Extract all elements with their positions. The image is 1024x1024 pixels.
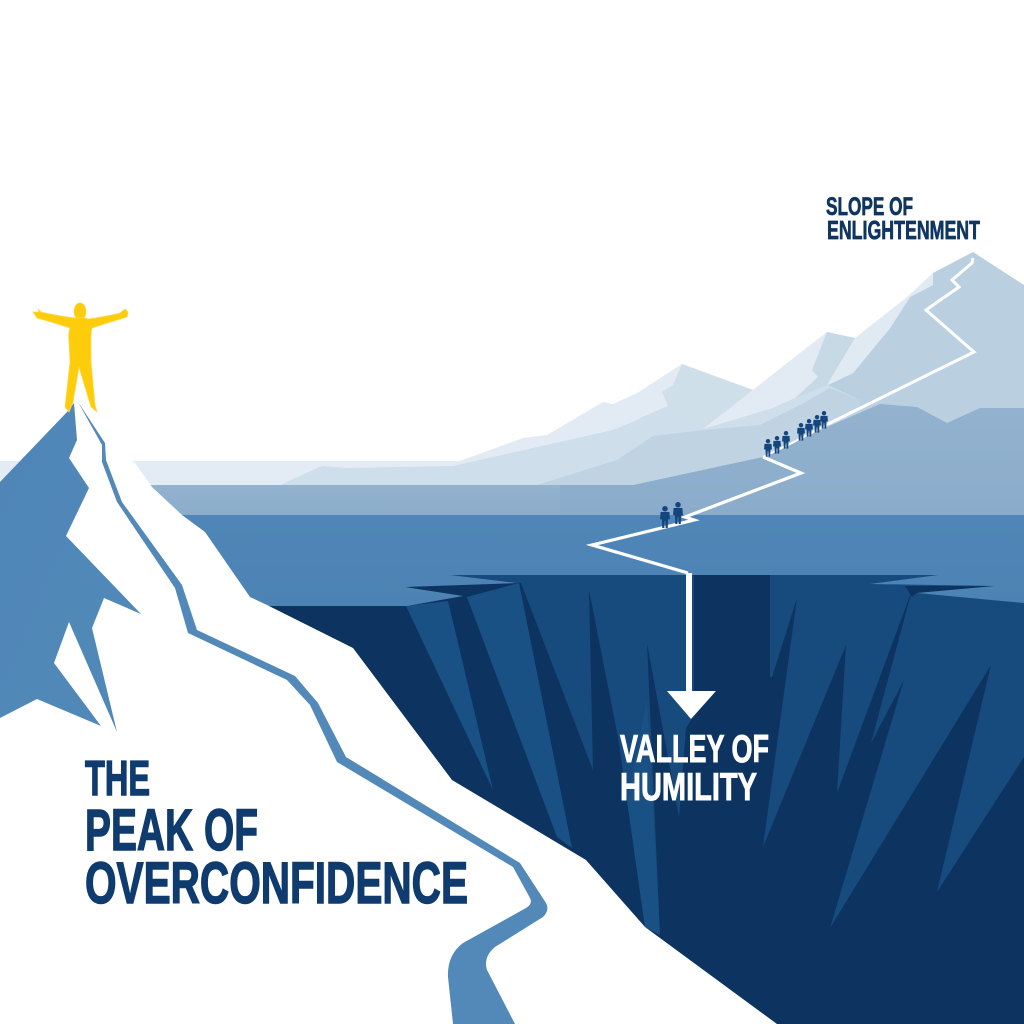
chasm tooth shadow <box>905 586 995 597</box>
descending blue trail <box>78 402 547 1024</box>
chasm <box>260 570 1024 1024</box>
big mountain summit <box>780 252 1024 450</box>
chasm rock slab <box>467 583 572 848</box>
chasm shard lower strip <box>627 700 660 935</box>
title: the peak of overconfidence: OVERCONFIDENCE <box>85 851 468 916</box>
white mountain slope <box>0 402 777 1024</box>
mountain blue shaded face <box>0 403 141 732</box>
chasm dark base <box>260 570 1024 1024</box>
chasm rock main left <box>449 575 694 935</box>
label: valley of humility: VALLEY OF <box>620 728 769 771</box>
far mountain middle peak <box>703 332 855 430</box>
label: slope of enlightenment <box>826 193 980 245</box>
chasm rock main right <box>763 575 1024 928</box>
title: the peak of overconfidence <box>85 752 468 916</box>
label: valley of humility: HUMILITY <box>620 766 757 809</box>
title: the peak of overconfidence: PEAK OF <box>85 798 258 863</box>
hikers group near valley <box>660 502 683 528</box>
label: valley of humility <box>620 728 769 809</box>
arrow down into valley <box>667 573 716 719</box>
far mountain range <box>457 252 1024 470</box>
yellow figure on summit <box>33 303 128 412</box>
hikers group on slope <box>764 411 828 457</box>
chasm rock shard left <box>406 601 493 790</box>
distant horizon bands <box>0 461 1024 516</box>
label: slope of enlightenment: SLOPE OF <box>826 193 913 221</box>
front range <box>560 404 1024 516</box>
far mountain left peak <box>457 364 760 470</box>
mid ridges <box>280 385 860 485</box>
title: the peak of overconfidence: THE <box>85 752 150 806</box>
climbing white path <box>592 258 974 573</box>
plain with cracked cliff edge <box>0 515 1024 606</box>
